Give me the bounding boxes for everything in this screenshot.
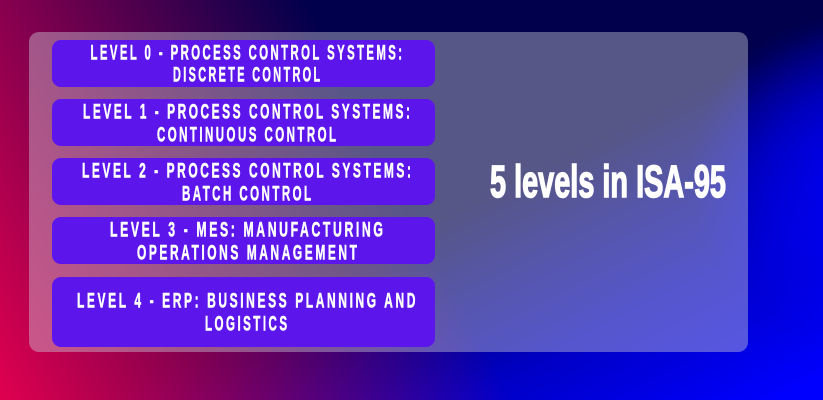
level 1 box: LEVEL 1 - PROCESS CONTROL SYSTEMS:	[83, 100, 412, 124]
level 0 box: DISCRETE CONTROL	[173, 62, 322, 86]
level 4 box	[52, 277, 435, 347]
panel: translucent card	[29, 32, 748, 352]
level 0 box	[52, 40, 435, 87]
level 3 box: LEVEL 3 - MES: MANUFACTURING	[110, 218, 386, 242]
level 3 box: OPERATIONS MANAGEMENT	[137, 240, 360, 264]
level 2 box	[52, 158, 435, 206]
level 2 box: BATCH CONTROL	[182, 182, 314, 206]
level 2 box: LEVEL 2 - PROCESS CONTROL SYSTEMS:	[82, 158, 414, 182]
level 3 box	[52, 217, 435, 264]
level 1 box	[52, 99, 435, 146]
level 4 box: LEVEL 4 - ERP: BUSINESS PLANNING AND	[77, 288, 418, 312]
level 4 box: LOGISTICS	[205, 312, 290, 336]
level 1 box: CONTINUOUS CONTROL	[157, 122, 338, 146]
level 0 box: LEVEL 0 - PROCESS CONTROL SYSTEMS:	[90, 40, 404, 64]
